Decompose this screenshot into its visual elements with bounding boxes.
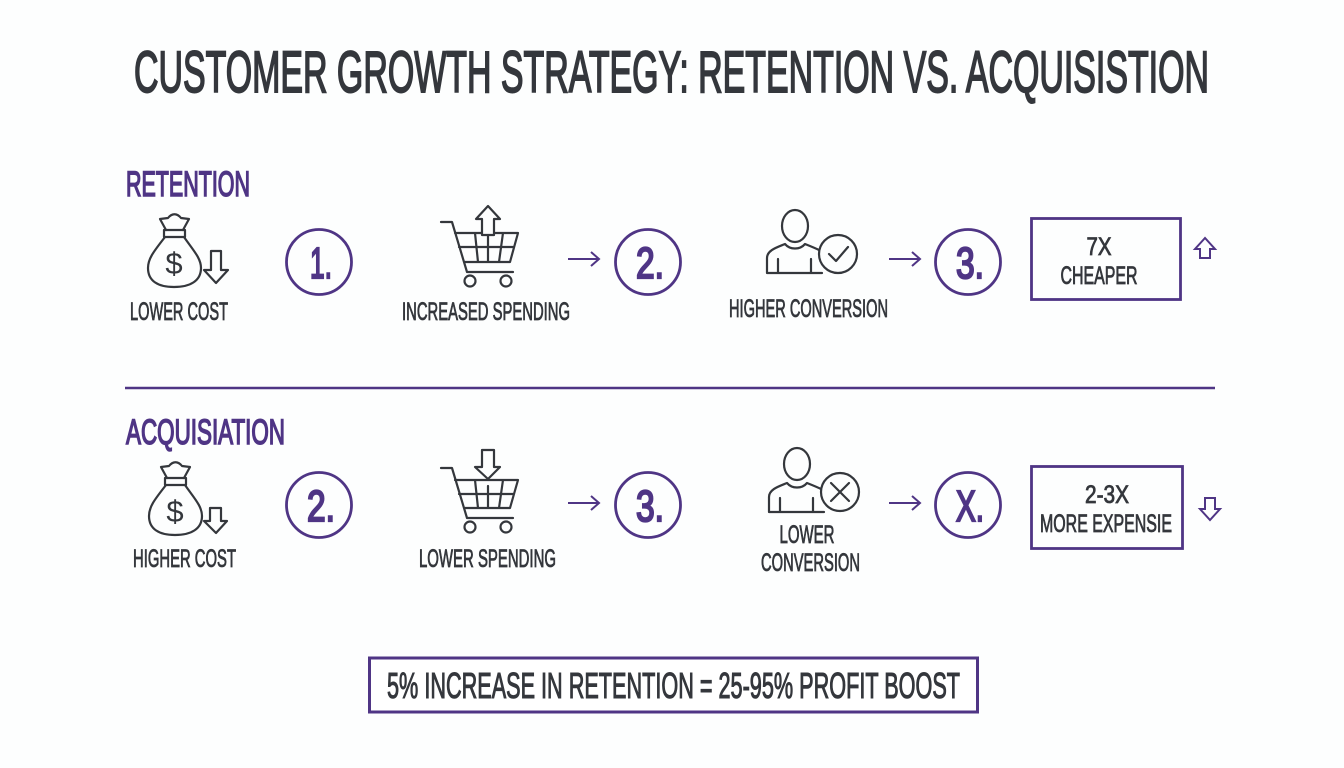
step badge 3 — [616, 472, 680, 538]
icon: down arrow — [1200, 498, 1220, 520]
step badge 2 — [286, 472, 352, 538]
callout: profit boost: 5% INCREASE IN RETENTION = 25-95% PROFIT BOOST — [387, 665, 960, 706]
callout: 2-3x more expensie: MORE EXPENSIE — [1040, 510, 1172, 538]
arrow — [889, 252, 920, 266]
step badge x — [936, 472, 1000, 538]
step badge x: X. — [956, 482, 984, 531]
panel: acquisition — [126, 413, 1220, 577]
label: lower conversion: LOWER — [780, 521, 834, 549]
heading: retention: RETENTION — [126, 165, 250, 204]
icon: money bag with down arrow — [149, 462, 227, 535]
heading: acquisiation: ACQUISIATION — [126, 413, 285, 452]
step badge 1 — [286, 230, 352, 294]
step badge 2: 2. — [636, 239, 664, 288]
icon: person with check — [767, 210, 857, 273]
icon: cart with down arrow — [441, 450, 518, 532]
step badge 1: 1. — [310, 239, 332, 288]
step badge 3: 3. — [956, 239, 984, 288]
arrow — [889, 496, 920, 510]
label: higher cost: HIGHER COST — [133, 545, 236, 573]
callout: profit boost — [370, 658, 978, 712]
callout: 7x cheaper — [1032, 218, 1180, 300]
label: lower cost: LOWER COST — [130, 298, 228, 326]
icon: cart with up arrow — [441, 206, 518, 286]
step badge 3 — [936, 230, 1000, 294]
step badge 3: 3. — [636, 482, 664, 531]
icon: up arrow — [1195, 238, 1215, 258]
step badge 2: 2. — [307, 482, 335, 531]
label: higher conversion: HIGHER CONVERSION — [729, 295, 888, 323]
panel: retention — [126, 165, 1215, 326]
step badge 2 — [616, 230, 680, 294]
arrow — [568, 252, 599, 266]
label: lower spending: LOWER SPENDING — [419, 545, 556, 573]
callout: 2-3x more expensie — [1032, 466, 1182, 548]
callout: 7x cheaper: 7X — [1086, 233, 1112, 261]
arrow — [568, 496, 599, 510]
label: increased spending: INCREASED SPENDING — [402, 298, 570, 326]
icon: person with x — [769, 448, 859, 512]
label: lower conversion — [761, 521, 860, 577]
icon: money bag with down arrow: $ — [166, 494, 184, 529]
icon: money bag with down arrow — [148, 214, 228, 287]
callout: 7x cheaper: CHEAPER — [1060, 262, 1138, 290]
label: lower conversion: CONVERSION — [761, 549, 860, 577]
callout: 2-3x more expensie: 2-3X — [1085, 481, 1129, 509]
divider — [125, 387, 1215, 389]
icon: money bag with down arrow: $ — [165, 246, 183, 281]
